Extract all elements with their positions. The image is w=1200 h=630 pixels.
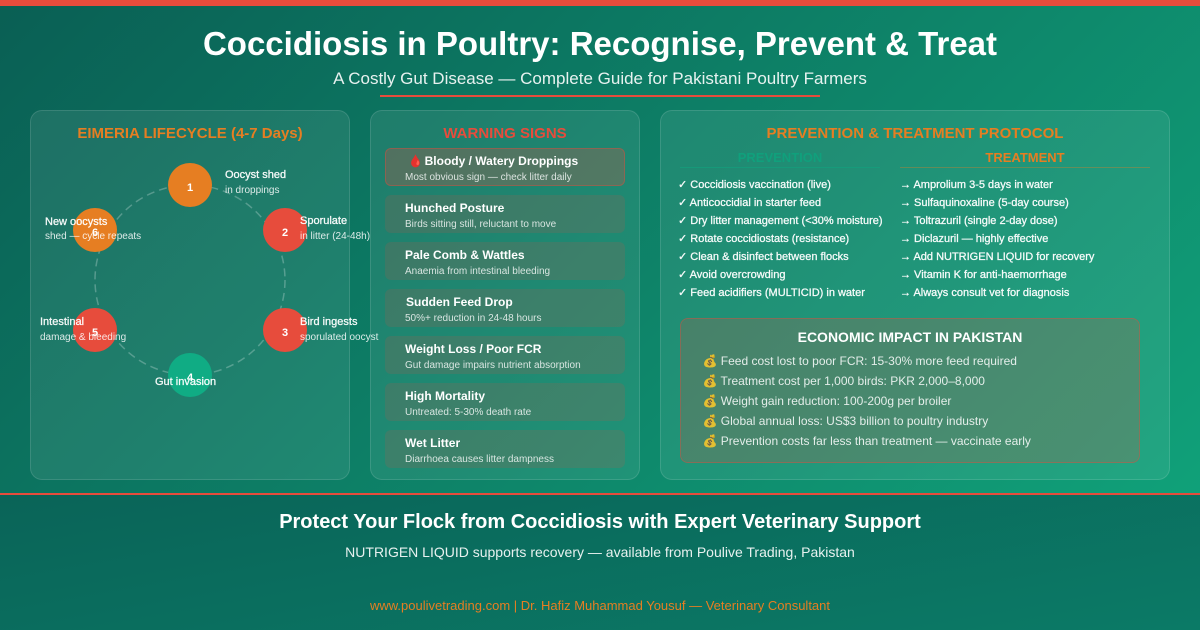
list: treatment: → Always consult vet for diagnosis [900, 287, 1069, 299]
stage 2: 2 [282, 227, 288, 239]
sign: wet litter [385, 430, 625, 468]
column heading: prevention [680, 151, 880, 168]
stage 5: Intestinal [40, 316, 84, 328]
stage 6: shed — cycle repeats [45, 231, 141, 242]
stage 5 [40, 308, 126, 352]
sign: hunched posture [385, 195, 625, 233]
stage 3: sporulated oocyst [300, 332, 378, 343]
list: prevention: ✓ Avoid overcrowding [678, 269, 785, 281]
stage 3: Bird ingests [300, 316, 357, 328]
sign: bloody droppings [385, 148, 625, 186]
list: prevention: ✓ Feed acidifiers (MULTICID) in water [678, 287, 865, 299]
list: prevention: ✓ Clean & disinfect between flocks [678, 251, 849, 263]
stage 1: in droppings [225, 185, 279, 196]
list: treatment: → Sulfaquinoxaline (5-day course) [900, 197, 1069, 209]
stage 1: 1 [187, 182, 193, 194]
sign: high mortality: Untreated: 5-30% death rate [405, 407, 531, 418]
stage 6: 6 [92, 227, 98, 239]
sign: hunched posture: Hunched Posture [405, 201, 504, 215]
callout list: 💰 Treatment cost per 1,000 birds: PKR 2,000–8,000 [702, 374, 985, 388]
stage 4: 4 [187, 372, 193, 384]
sign: pale comb: Pale Comb & Wattles [405, 248, 525, 262]
sign: pale comb [385, 242, 625, 280]
title: Coccidiosis in Poultry: Recognise, Prevent & Treat [203, 25, 997, 62]
callout heading: ECONOMIC IMPACT IN PAKISTAN [798, 329, 1022, 345]
stage 6 [45, 208, 141, 252]
title underline [380, 95, 820, 97]
sign: bloody droppings: Most obvious sign — check litter daily [405, 172, 572, 183]
stage 2: in litter (24-48h) [300, 231, 370, 242]
panel: Eimeria lifecycle [30, 110, 350, 480]
list: prevention: ✓ Dry litter management (<30% moisture) [678, 215, 883, 227]
callout list: 💰 Weight gain reduction: 100-200g per broiler [702, 394, 951, 408]
sign: weight loss: Weight Loss / Poor FCR [405, 342, 541, 356]
list: prevention: ✓ Rotate coccidiostats (resistance) [678, 233, 849, 245]
sign: high mortality: High Mortality [405, 389, 485, 403]
sign: bloody droppings: 🩸 Bloody / Watery Droppings [408, 154, 578, 168]
stage 4 [155, 353, 216, 397]
stage 2: Sporulate [300, 215, 347, 227]
list: prevention: ✓ Anticoccidial in starter feed [678, 197, 821, 209]
callout list: 💰 Feed cost lost to poor FCR: 15-30% more feed required [702, 354, 1017, 368]
stage 3: 3 [282, 327, 288, 339]
stage 1 [168, 163, 286, 207]
top accent bar [0, 0, 1200, 6]
lifecycle ring [94, 187, 286, 373]
sign: high mortality [385, 383, 625, 421]
stage 6: New oocysts [45, 216, 107, 228]
list: treatment: → Diclazuril — highly effective [900, 233, 1048, 245]
heading: protocol: PREVENTION & TREATMENT PROTOCOL [767, 125, 1063, 142]
sign: wet litter: Wet Litter [405, 436, 460, 450]
callout list [702, 354, 1031, 448]
sign: hunched posture: Birds sitting still, reluctant to move [405, 219, 556, 230]
sign: feed drop: Sudden Feed Drop [406, 295, 513, 309]
callout: economic impact [680, 318, 1140, 463]
sign: pale comb: Anaemia from intestinal bleeding [405, 266, 550, 277]
sign: wet litter: Diarrhoea causes litter dampness [405, 454, 554, 465]
list: prevention [678, 179, 883, 299]
callout list: 💰 Prevention costs far less than treatment — vaccinate early [702, 434, 1031, 448]
stage 4: Gut invasion [155, 376, 216, 388]
heading: warning signs: WARNING SIGNS [443, 125, 567, 142]
list: treatment [900, 179, 1094, 299]
list: treatment: → Vitamin K for anti-haemorrhage [900, 269, 1067, 281]
sign: weight loss: Gut damage impairs nutrient absorption [405, 360, 581, 371]
panel: prevention and treatment [660, 110, 1170, 480]
stage 3 [263, 308, 378, 352]
sign: weight loss [385, 336, 625, 374]
panel: warning signs [370, 110, 640, 480]
column heading: treatment [900, 151, 1150, 168]
subtitle: A Costly Gut Disease — Complete Guide for Pakistani Poultry Farmers [333, 69, 867, 88]
list: prevention: ✓ Coccidiosis vaccination (live) [678, 179, 831, 191]
callout list: 💰 Global annual loss: US$3 billion to poultry industry [702, 414, 988, 428]
list: treatment: → Amprolium 3-5 days in water [900, 179, 1053, 191]
sign: feed drop: 50%+ reduction in 24-48 hours [405, 313, 541, 324]
stage 1: Oocyst shed [225, 169, 286, 181]
column heading: treatment: TREATMENT [985, 150, 1065, 165]
footer headline: Protect Your Flock from Coccidiosis with Expert Veterinary Support [279, 511, 921, 533]
stage 5: 5 [92, 327, 98, 339]
stage 2 [263, 208, 370, 252]
footer [0, 493, 1200, 630]
footer credit: www.poulivetrading.com | Dr. Hafiz Muhammad Yousuf — Veterinary Consultant [370, 598, 830, 613]
footer subline: NUTRIGEN LIQUID supports recovery — available from Poulive Trading, Pakistan [345, 544, 855, 560]
column heading: prevention: PREVENTION [738, 150, 822, 165]
list: treatment: → Add NUTRIGEN LIQUID for recovery [900, 251, 1094, 263]
stage 5: damage & bleeding [40, 332, 126, 343]
heading: lifecycle: EIMERIA LIFECYCLE (4-7 Days) [77, 125, 303, 142]
sign: feed drop [385, 289, 625, 327]
list: treatment: → Toltrazuril (single 2-day dose) [900, 215, 1058, 227]
